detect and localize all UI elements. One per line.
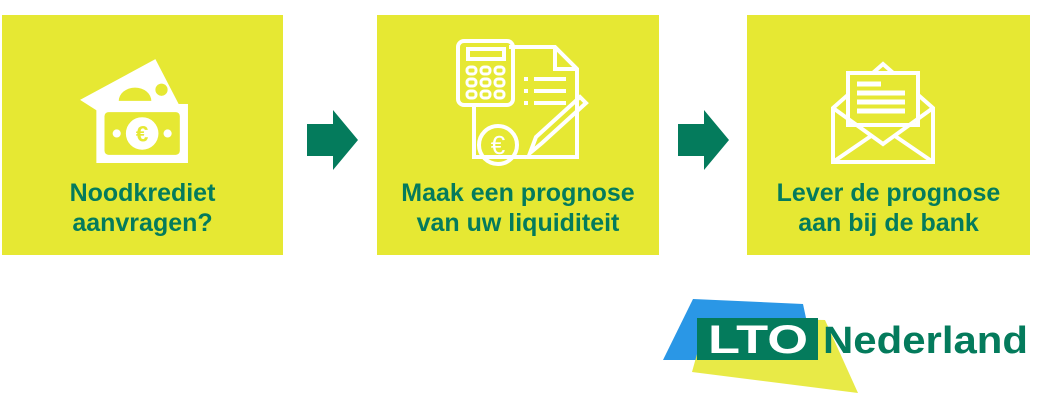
text: step 3: Lever de prognose [777,179,1000,207]
panel: step 3 [747,15,1030,255]
text: step 1 [70,179,216,237]
text: step 1: aanvragen? [72,209,213,237]
text: step 2 [401,179,635,237]
icon: banknotes: € [136,122,149,147]
arrow 1 [307,110,358,170]
logo: LTO Nederland: Nederland [823,320,1028,362]
text: step 1: Noodkrediet [70,179,215,207]
logo: LTO Nederland: LTO [708,318,808,362]
icon: envelope [831,62,935,164]
text: step 3: aan bij de bank [798,209,979,237]
logo: LTO Nederland [663,299,1028,393]
text: step 2: van uw liquiditeit [417,209,619,237]
panel: step 2 [377,15,659,255]
text: step 2: Maak een prognose [401,179,635,207]
icon: calculator and document [456,39,589,166]
arrow 2 [678,110,729,170]
icon: calculator and document: € [491,130,506,160]
text: step 3 [777,179,1000,237]
icon: banknotes [80,59,188,163]
panel: step 1 [2,15,283,255]
